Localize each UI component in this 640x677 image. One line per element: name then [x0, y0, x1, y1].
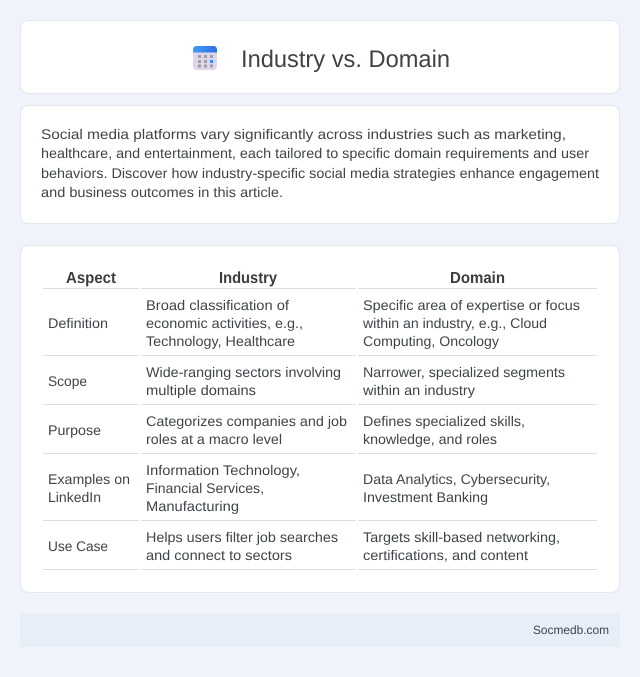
table row: Examples on LinkedIn: LinkedIn [48, 489, 101, 505]
table row: Definition: Broad classification of [146, 297, 289, 313]
table row: Purpose: Purpose [48, 422, 101, 438]
table row: Examples on LinkedIn: Data Analytics, Cybersecurity, [363, 471, 550, 487]
footer [20, 613, 620, 647]
table row: Examples on LinkedIn: Information Technology, [146, 462, 300, 478]
table row: Examples on LinkedIn [43, 462, 597, 520]
table row: Use Case: Targets skill-based networking, [363, 529, 560, 545]
table row: Examples on LinkedIn: Financial Services, [146, 480, 264, 496]
table row: Definition [43, 297, 597, 356]
text block: introduction paragraph [41, 126, 599, 200]
table row: Use Case: Use Case [48, 538, 108, 554]
table row: Scope: Narrower, specialized segments [363, 364, 565, 380]
panel: introduction [20, 106, 620, 224]
table header [43, 270, 597, 288]
table row: Purpose [43, 413, 597, 454]
table row: Scope: Scope [48, 373, 87, 389]
table row: Definition: within an industry, e.g., Cloud [362, 315, 547, 331]
table row: Purpose: roles at a macro level [146, 431, 282, 447]
text block: introduction paragraph: behaviors. Discover how industry-specific social media strategies enhance engagement [41, 165, 599, 181]
table row: Definition: Specific area of expertise or focus [363, 297, 580, 313]
panel: comparison table [20, 246, 620, 592]
table row: Examples on LinkedIn: Investment Banking [363, 489, 488, 505]
table row: Use Case: certifications, and content [363, 547, 528, 563]
table row: Purpose: Defines specialized skills, [363, 413, 525, 429]
table row: Definition: economic activities, e.g., [146, 315, 303, 331]
table row: Examples on LinkedIn: Manufacturing [146, 498, 239, 514]
table row: Definition: Technology, Healthcare [146, 333, 295, 349]
table header: Industry [219, 270, 277, 287]
table header: Aspect [66, 270, 117, 287]
panel: title card [20, 20, 620, 94]
table row: Scope: Wide-ranging sectors involving [146, 364, 341, 380]
text block: introduction paragraph: Social media platforms vary significantly across industries such as marketing, [41, 126, 566, 142]
table row: Use Case [43, 529, 597, 570]
title: Industry vs. Domain [241, 46, 450, 73]
table row: Scope [43, 364, 597, 404]
table row: Use Case: Helps users filter job searches [146, 529, 338, 545]
footer: Socmedb.com [533, 623, 609, 637]
text block: introduction paragraph: healthcare, and entertainment, each tailored to specific domain requirements and user [41, 145, 589, 161]
table row: Scope: within an industry [362, 382, 475, 398]
table row: Use Case: and connect to sectors [146, 547, 292, 563]
table row: Purpose: knowledge, and roles [363, 431, 497, 447]
table row: Scope: multiple domains [146, 382, 256, 398]
table row: Examples on LinkedIn: Examples on [48, 471, 130, 487]
icon: calendar [193, 46, 217, 70]
table row: Purpose: Categorizes companies and job [146, 413, 347, 429]
text block: introduction paragraph: and business outcomes in this article. [41, 184, 283, 200]
table header: Domain [450, 270, 505, 287]
table row: Definition: Computing, Oncology [363, 333, 499, 349]
table row: Definition: Definition [48, 315, 108, 331]
